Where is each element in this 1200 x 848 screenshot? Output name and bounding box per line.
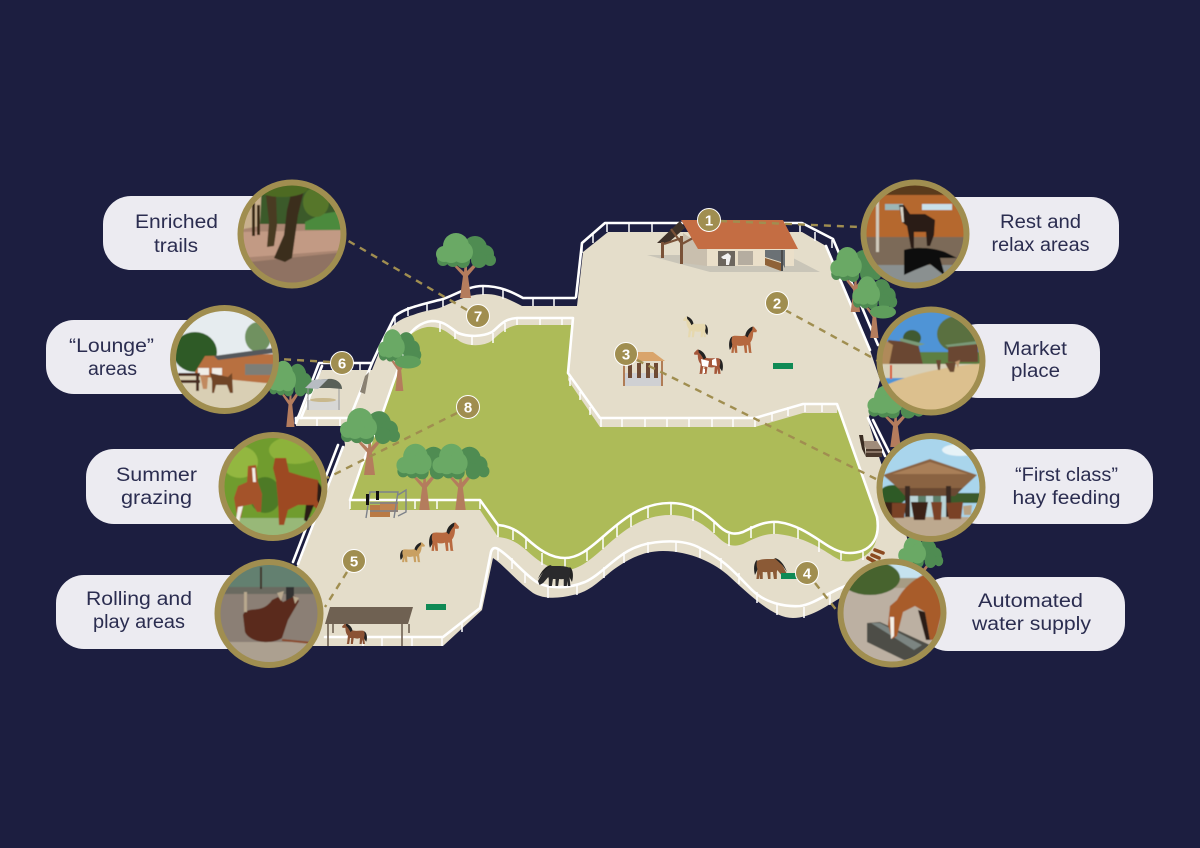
lounge shelter — [305, 379, 342, 410]
callout: Rest and relax areas: relax areas — [992, 235, 1090, 256]
tree: corridor — [378, 329, 421, 391]
connector 2 — [785, 310, 880, 362]
tree: pair centre-right — [432, 444, 489, 510]
photo: summer grazing — [224, 438, 322, 535]
callout: First class hay feeding: “First class” — [1015, 465, 1118, 486]
photo: enriched trails — [244, 186, 340, 282]
map ground: green meadow — [350, 325, 878, 570]
logs — [868, 550, 883, 562]
callout: Rolling and play areas: play areas — [93, 612, 185, 633]
photo: market place — [882, 312, 980, 410]
callout: Enriched trails: Enriched — [135, 212, 218, 233]
tree: lounge — [268, 361, 313, 427]
lane texture strip — [360, 372, 369, 394]
callout: Rest and relax areas — [861, 180, 1119, 289]
connector 7 — [345, 239, 467, 310]
ring: water trough — [840, 562, 944, 664]
callout: Automated water supply — [838, 559, 1125, 669]
feeding gate — [366, 490, 406, 518]
tree: right middle — [852, 276, 897, 338]
connector 5 — [325, 572, 347, 607]
callout: Summer grazing: Summer — [116, 465, 198, 486]
ring: lounge — [173, 308, 276, 411]
callout: Market place: Market — [1003, 339, 1068, 360]
connector 1 — [720, 221, 860, 227]
photo: rest area — [866, 186, 964, 282]
badge 1: 1 — [705, 212, 713, 230]
badge 6 — [330, 352, 354, 374]
badge 7: 7 — [474, 308, 482, 326]
horse: cream — [683, 316, 708, 337]
photo: rolling horse — [220, 565, 318, 662]
fences — [293, 223, 889, 646]
badge 2 — [766, 292, 788, 314]
callout: Automated water supply: water supply — [971, 614, 1092, 635]
badge 7 — [466, 304, 490, 328]
stable building — [647, 220, 820, 272]
callout: Lounge areas: “Lounge” — [69, 336, 154, 357]
field shelter — [325, 607, 413, 646]
callout: Summer grazing: grazing — [121, 488, 192, 509]
tree: top right — [830, 247, 881, 312]
badge 8 — [456, 396, 480, 418]
small crown: corridor tree — [395, 356, 421, 368]
badge 1 — [698, 208, 720, 232]
callout: Automated water supply: Automated — [978, 591, 1083, 612]
badge 4 — [796, 562, 818, 584]
horse: pinto — [694, 349, 723, 374]
tree: bottom right — [898, 536, 943, 595]
connector 4 — [815, 583, 838, 612]
badge 4: 4 — [803, 566, 812, 582]
horse: lower yard bay — [429, 523, 459, 551]
callout: Rest and relax areas: Rest and — [1000, 212, 1081, 233]
callout: Enriched trails — [103, 179, 346, 290]
callout: Rolling and play areas — [56, 559, 324, 670]
water trough: yard — [773, 363, 793, 369]
badge 8: 8 — [464, 400, 472, 416]
horse: black grazing — [538, 565, 573, 586]
photo: water trough — [844, 564, 940, 662]
ring: hay feeder — [880, 436, 982, 539]
badge 3 — [614, 342, 638, 366]
horse: bay — [729, 326, 757, 353]
callout: Lounge areas: areas — [88, 359, 137, 380]
connector 6 — [278, 359, 330, 362]
ring: rest area — [864, 182, 966, 286]
callout: Market place — [877, 307, 1100, 420]
tree: right lower — [867, 385, 924, 447]
badge 5 — [342, 550, 366, 572]
steps — [859, 435, 882, 457]
photo: hay feeder — [882, 439, 980, 536]
small crown: right tree — [870, 306, 896, 318]
ring: rolling horse — [218, 562, 320, 665]
badge 3: 3 — [622, 346, 630, 364]
connector 3 — [637, 360, 878, 480]
horse: dun pony — [400, 542, 425, 562]
water trough: lower yard — [426, 604, 446, 610]
photo: lounge — [176, 311, 273, 408]
callout: Enriched trails: trails — [154, 236, 198, 257]
badge 2: 2 — [773, 296, 781, 312]
hay shelter — [623, 352, 665, 386]
ring: enriched trails — [240, 182, 344, 286]
callout: Market place: place — [1011, 361, 1060, 382]
callout: Lounge areas — [46, 305, 282, 419]
connector 8 — [327, 413, 457, 478]
badge 6: 6 — [338, 356, 346, 372]
callout: Rolling and play areas: Rolling and — [86, 589, 192, 610]
callout: Summer grazing — [86, 432, 328, 546]
badge 5: 5 — [350, 554, 358, 570]
callout: First class hay feeding: hay feeding — [1012, 488, 1120, 509]
ring: summer grazing — [222, 435, 324, 538]
horse: brown grazing — [754, 558, 787, 579]
tree: left meadow — [340, 408, 400, 475]
tree: pair centre-left — [396, 444, 453, 510]
ring: market place — [880, 310, 982, 412]
callout: First class hay feeding — [877, 433, 1153, 543]
tree: top centre — [436, 233, 496, 298]
map ground: paddock — [270, 232, 913, 646]
water trough: meadow edge — [781, 573, 799, 579]
